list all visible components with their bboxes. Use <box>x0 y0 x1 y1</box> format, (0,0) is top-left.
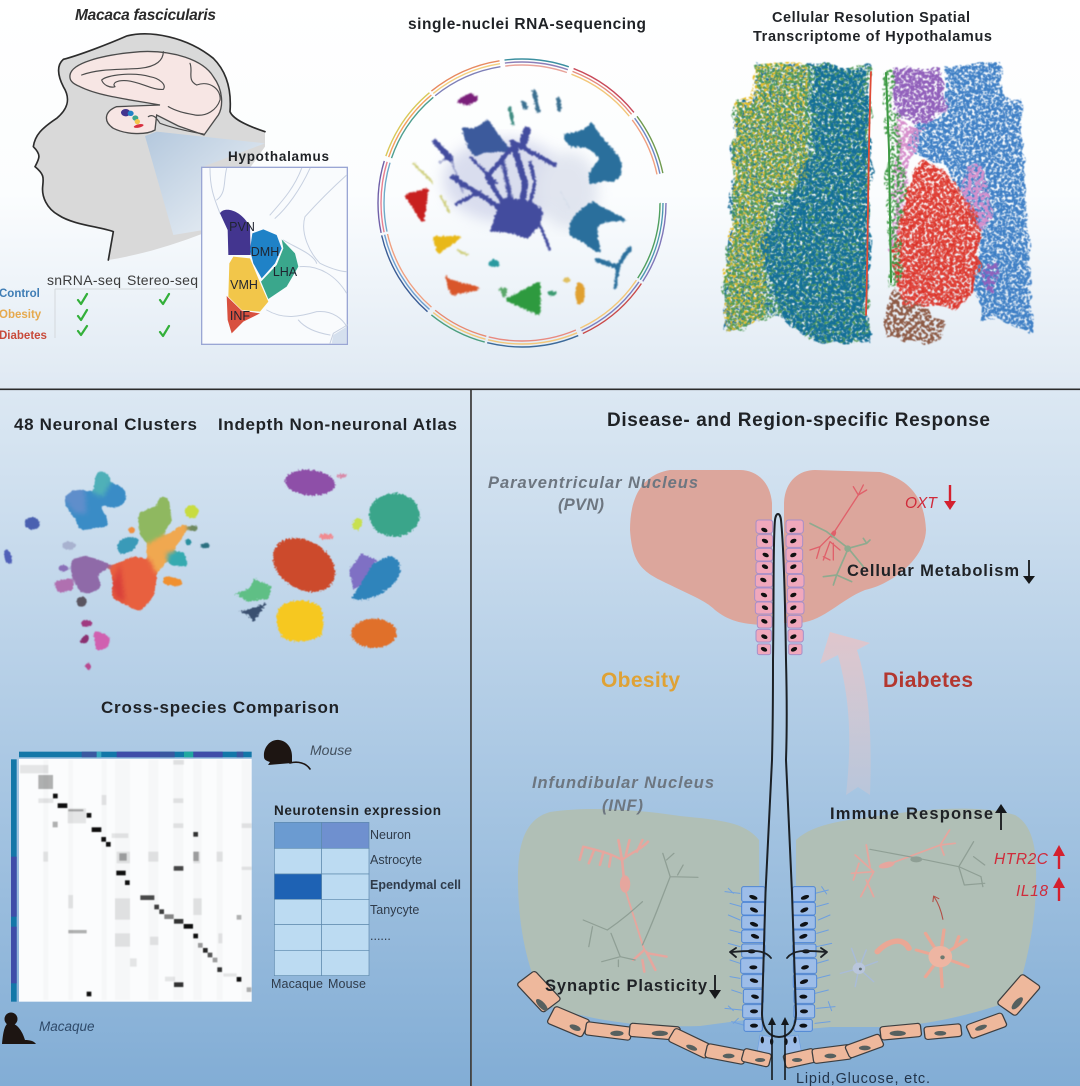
region labels: INF <box>230 309 250 323</box>
faint grey cells <box>20 760 252 981</box>
heading: 48 Neuronal Clusters: 48 Neuronal Clusters <box>14 415 197 434</box>
horizontal divider <box>0 388 1080 390</box>
corner shade <box>332 327 347 344</box>
label: Synaptic Plasticity with down arrow: Synaptic Plasticity <box>545 977 708 995</box>
table title: Neurotensin expression <box>274 803 441 818</box>
panel: lower-right background <box>472 390 1080 1086</box>
check marks <box>78 294 169 336</box>
zoom wedge <box>145 132 265 235</box>
row labels: Control <box>0 288 40 300</box>
chart: cross-species correlation heatmap <box>11 752 252 1002</box>
faint column streaks <box>43 760 251 1000</box>
table: sequencing methods: Stereo-seq <box>127 272 198 288</box>
chart: neurotensin expression table <box>271 803 461 991</box>
head outline <box>33 34 265 260</box>
panel: top background <box>0 0 1080 389</box>
heading: Disease- and Region-specific Response: Disease- and Region-specific Response <box>607 410 990 431</box>
neurons in PVN <box>810 485 870 585</box>
label: IL18 with up arrow: IL18 <box>1016 883 1048 900</box>
solid green edge <box>886 73 891 282</box>
label: Infundibular Nucleus: (INF) <box>602 797 644 815</box>
chart: neurotensin expression table: Ependymal cell <box>370 878 461 892</box>
icon: mouse <box>264 740 310 769</box>
chart: neurotensin expression table: ...... <box>370 929 391 943</box>
heading: Cross-species Comparison: Cross-species Comparison <box>101 698 339 717</box>
tanycytes <box>725 887 835 1031</box>
label: OXT with down arrow <box>905 485 956 512</box>
chart: spatial transcriptome left slab <box>720 55 880 350</box>
top bar <box>19 752 252 757</box>
region labels: VMH <box>230 278 258 292</box>
chart: non-neuronal atlas UMAP <box>235 468 420 648</box>
chart: spatial transcriptome right slab <box>880 60 1035 345</box>
atlas frame <box>202 167 347 344</box>
diagonal black cells <box>53 794 241 996</box>
heatmap field <box>19 759 252 1002</box>
region: infundibular nucleus right <box>796 809 1036 1030</box>
label: Infundibular Nucleus: Infundibular Nucleus <box>532 774 714 792</box>
heading: Indepth Non-neuronal Atlas: Indepth Non-neuronal Atlas <box>218 415 457 434</box>
label: Paraventricular Nucleus: (PVN) <box>558 496 604 514</box>
chart: circular snRNA UMAP <box>378 59 666 347</box>
row labels: Neuron <box>370 828 411 842</box>
label: Paraventricular Nucleus <box>488 474 698 514</box>
small tanycytes at ventricle floor <box>757 1035 802 1055</box>
label: Macaque: Macaque <box>39 1019 95 1034</box>
clusters <box>405 91 630 315</box>
label: Diabetes: Diabetes <box>883 669 973 692</box>
arrow: large pale upward arrow <box>820 632 871 795</box>
heading: spatial transcriptome <box>753 10 992 45</box>
region labels: LHA <box>273 265 298 279</box>
neurons in INF left <box>580 840 698 972</box>
panel: lower-left background <box>0 390 471 1086</box>
region: paraventricular nucleus right <box>784 470 926 623</box>
arrow: curved left signal <box>730 948 771 958</box>
label: Infundibular Nucleus <box>532 774 714 815</box>
icon: macaque <box>2 1012 36 1044</box>
microglia and astrocyte <box>840 896 968 987</box>
label: OXT with down arrow: OXT <box>905 495 938 512</box>
region labels <box>229 220 298 323</box>
table: sequencing methods: Obesity <box>0 309 42 321</box>
neurons in INF right <box>852 830 985 897</box>
label: HTR2C with up arrow: HTR2C <box>994 851 1049 868</box>
table cells <box>274 822 369 976</box>
label: Immune Response with up arrow <box>830 804 1007 830</box>
table rules <box>55 289 196 338</box>
region: DMH <box>250 229 282 278</box>
arrow: curved right signal <box>787 948 827 958</box>
third ventricle outline <box>762 514 796 1037</box>
chart: neurotensin expression table: Tanycyte <box>370 903 419 917</box>
atlas outlines <box>210 168 347 343</box>
label: Obesity: Obesity <box>601 669 680 692</box>
heading: spatial transcriptome: Transcriptome of Hypothalamus <box>753 29 992 45</box>
ventral ependymal cell layer <box>516 971 1041 1069</box>
label: Synaptic Plasticity with down arrow <box>545 975 721 999</box>
region: VMH <box>228 257 268 312</box>
PVN ependymal cells <box>755 520 804 655</box>
label: Paraventricular Nucleus: Paraventricular Nucleus <box>488 474 698 492</box>
left bar <box>11 759 17 1002</box>
region labels: PVN <box>229 220 255 234</box>
panel: hypothalamus atlas <box>202 167 347 344</box>
heading: single-nuclei RNA-sequencing: single-nuclei RNA-sequencing <box>408 16 646 33</box>
brain <box>70 51 222 135</box>
heading: spatial transcriptome: Cellular Resolution Spatial <box>772 10 970 26</box>
vertical divider <box>470 389 472 1086</box>
chart: neurotensin expression table: Mouse <box>328 977 366 991</box>
outer ring segments <box>378 59 666 347</box>
blurred matrix values <box>20 760 252 1000</box>
head silhouette <box>33 34 265 260</box>
chart: neuronal cluster UMAP <box>3 472 212 673</box>
region labels: DMH <box>251 245 279 259</box>
heading: Hypothalamus: Hypothalamus <box>228 149 329 164</box>
hypothalamus mini regions <box>121 109 144 129</box>
label: Cellular Metabolism with down arrow: Cellular Metabolism <box>847 562 1019 580</box>
illustration: macaque head and brain <box>33 34 265 260</box>
brain folds <box>82 52 220 134</box>
heading: Macaca fascicularis: Macaca fascicularis <box>75 7 216 24</box>
label: IL18 with up arrow <box>1016 877 1065 901</box>
red border line <box>866 72 871 315</box>
label: Immune Response with up arrow: Immune Response <box>830 805 993 823</box>
region: INF <box>227 296 260 333</box>
darker cluster cells <box>38 775 251 992</box>
central arrows: nutrient entry <box>768 1017 789 1080</box>
column labels: Macaque <box>271 977 323 991</box>
table: sequencing methods: Diabetes <box>0 330 47 342</box>
label: HTR2C with up arrow <box>994 845 1065 869</box>
label: Mouse: Mouse <box>310 742 352 758</box>
label: Cellular Metabolism with down arrow <box>847 560 1035 584</box>
region: LHA <box>261 239 298 299</box>
region: paraventricular nucleus left <box>630 470 772 625</box>
table: sequencing methods <box>0 272 198 342</box>
faint cell haze <box>443 138 598 228</box>
region: PVN <box>220 210 251 255</box>
chart: neurotensin expression table: Astrocyte <box>370 853 422 867</box>
column headers: snRNA-seq <box>47 272 121 288</box>
region: infundibular nucleus left <box>518 809 760 1030</box>
